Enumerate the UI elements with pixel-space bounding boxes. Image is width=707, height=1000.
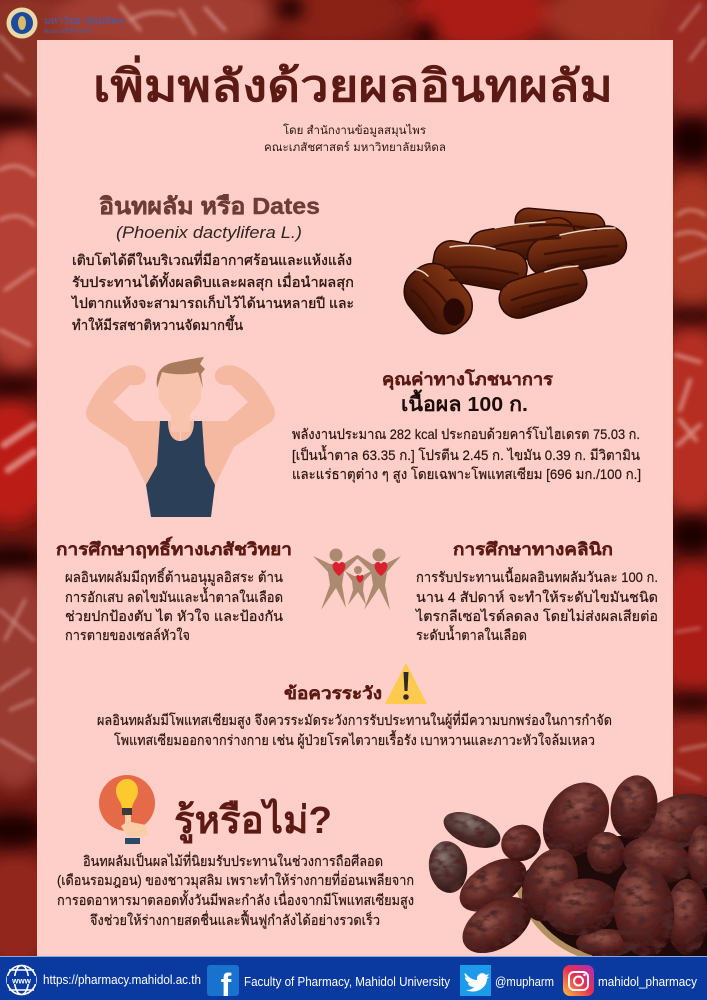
did you know text	[57, 852, 414, 929]
facebook name: Faculty of Pharmacy, Mahidol University	[244, 974, 450, 989]
pharmacology text: ช่วยปกป้องตับ ไต หัวใจ และป้องกัน	[65, 608, 283, 624]
heading: caution: ข้อควรระวัง	[284, 684, 382, 703]
icon: instagram	[563, 965, 594, 996]
description text: รับประทานได้ทั้งผลดิบและผลสุก เมื่อนำผลสุก	[72, 272, 354, 291]
tank top	[146, 421, 215, 517]
heading: clinical: การศึกษาทางคลินิก	[453, 540, 613, 559]
icon: www globe	[7, 966, 36, 994]
description text: ทำให้มีรสชาติหวานจัดมากขึ้น	[72, 315, 243, 333]
icon: twitter	[460, 965, 491, 996]
nutrition text	[292, 426, 641, 483]
logo: Mahidol University	[6, 8, 124, 38]
caution text	[97, 711, 612, 749]
nutrition text: และแร่ธาตุต่าง ๆ สูง โดยเฉพาะโพแทสเซียม [696 มก./100 ก.]	[292, 466, 641, 483]
subheading: per 100 g: เนื้อผล 100 ก.	[401, 389, 528, 416]
instagram handle: mahidol_pharmacy	[598, 974, 697, 989]
clinical text: ระดับน้ำตาลในเลือด	[416, 625, 527, 643]
byline: โดย สำนักงานข้อมูลสมุนไพร	[283, 123, 426, 137]
heading: dates: อินทผลัม หรือ Dates	[99, 193, 320, 219]
website url: https://pharmacy.mahidol.ac.th	[43, 972, 201, 987]
twitter handle: @mupharm	[495, 974, 554, 989]
panel: clinical studies	[415, 540, 658, 643]
clinical text: นาน 4 สัปดาห์ จะทำให้ระดับไขมันชนิด	[416, 589, 658, 605]
illustration: brown dates	[394, 207, 630, 344]
pharmacology text: ผลอินทผลัมมีฤทธิ์ต้านอนุมูลอิสระ ต้าน	[65, 567, 283, 586]
description text	[71, 251, 354, 333]
logo: Mahidol University: คณะเภสัชศาสตร์	[44, 27, 92, 35]
clinical text	[415, 567, 658, 643]
icon: lightbulb and finger	[99, 775, 155, 844]
panel: nutrition	[292, 369, 641, 483]
panel: caution	[97, 663, 612, 749]
panel: pharmacological studies	[56, 536, 292, 643]
logo: Mahidol University: มหาวิทยาลัยมหิดล	[44, 15, 124, 27]
footer bar	[0, 956, 707, 1000]
clinical text: ไตรกลีเซอไรด์ลดลง โดยไม่ส่งผลเสียต่อ	[415, 608, 658, 624]
caution text: โพแทสเซียมออกจากร่างกาย เช่น ผู้ป่วยโรคไตวายเรื้อรัง เบาหวานและภาวะหัวใจล้มเหลว	[114, 730, 595, 749]
caution text: ผลอินทผลัมมีโพแทสเซียมสูง จึงควรระมัดระวังการรับประทานในผู้ที่มีความบกพร่องในการกำจัด	[97, 711, 612, 729]
did you know text: อินทผลัมเป็นผลไม้ที่นิยมรับประทานในช่วงการถือศีลอด	[83, 852, 383, 869]
did you know text: จึงช่วยให้ร่างกายสดชื่นและฟื้นฟูกำลังได้อย่างรวดเร็ว	[90, 910, 380, 929]
description text: เติบโตได้ดีในบริเวณที่มีอากาศร้อนและแห้งแล้ง	[72, 251, 352, 268]
did you know text: (เดือนรอมฎอน) ของชาวมุสลิม เพราะทำให้ร่างกายที่อ่อนเพลียจาก	[57, 871, 414, 889]
pharmacology text	[65, 567, 283, 643]
neck and face	[158, 366, 202, 432]
nutrition text: [เป็นน้ำตาล 63.35 ก.] โปรตีน 2.45 ก. ไขมัน 0.39 ก. มีวิตามิน	[292, 445, 640, 463]
nutrition text: พลังงานประมาณ 282 kcal ประกอบด้วยคาร์โบไฮเดรต 75.03 ก.	[292, 426, 640, 442]
pharmacology text: การอักเสบ ลดไขมันและน้ำตาลในเลือด	[65, 587, 283, 605]
did you know text: การอดอาหารมาตลอดทั้งวันมีพละกำลัง เนื่องจากมีโพแทสเซียมสูง	[57, 890, 414, 909]
heading: pharmacology: การศึกษาฤทธิ์ทางเภสัชวิทยา	[56, 536, 292, 559]
heading: did you know: รู้หรือไม่?	[174, 798, 332, 844]
clinical text: การรับประทานเนื้อผลอินทผลัมวันละ 100 ก.	[416, 567, 658, 585]
icon: family with hearts	[313, 548, 401, 610]
byline: คณะเภสัชศาสตร์ มหาวิทยาลัยมหิดล	[264, 140, 446, 154]
byline	[264, 123, 446, 154]
icon: www globe: www	[11, 976, 32, 986]
pharmacology text: การตายของเซลล์หัวใจ	[65, 627, 190, 643]
hair	[157, 357, 205, 388]
panel: about dates	[71, 193, 354, 333]
title: เพิ่มพลังด้วยผลอินทผลัม	[93, 55, 613, 111]
illustration: muscular man in tank top	[86, 357, 275, 517]
description text: ไปตากแห้งจะสามารถเก็บไว้ได้นานหลายปี และ	[71, 294, 354, 311]
icon: facebook	[207, 965, 239, 1000]
scientific name: (Phoenix dactylifera L.)	[116, 223, 302, 242]
photo: bowl of dates	[426, 770, 707, 965]
panel: did you know	[57, 798, 414, 929]
icon: warning triangle	[385, 663, 427, 704]
heading: nutrition: คุณค่าทางโภชนาการ	[382, 369, 554, 390]
